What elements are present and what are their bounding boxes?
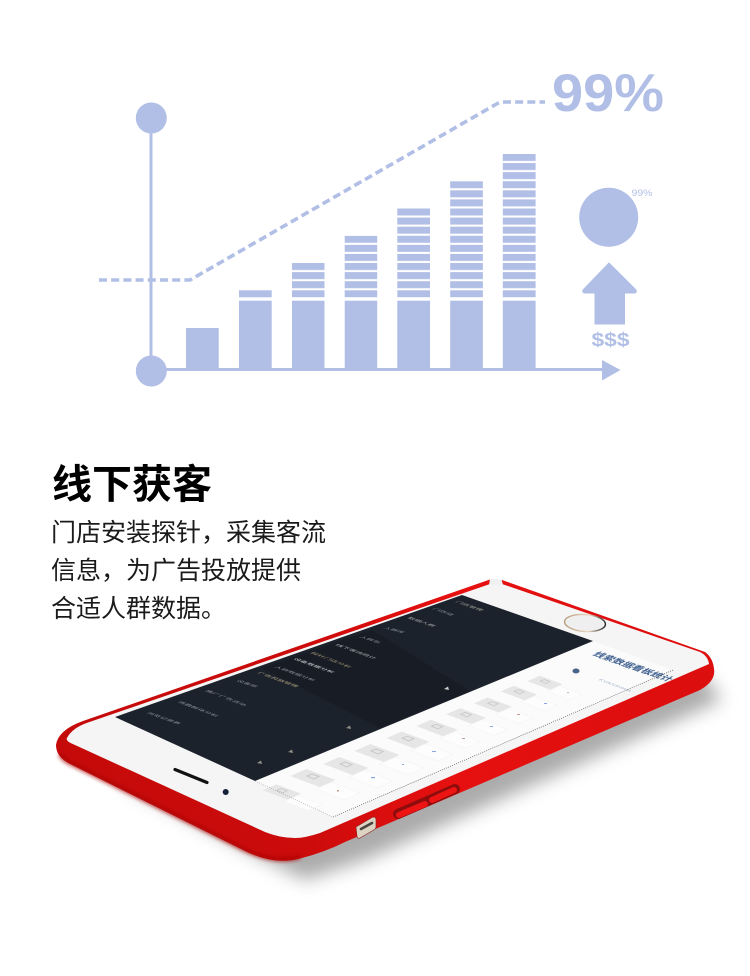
- app sub label: KVASSdata: [597, 679, 634, 693]
- panel left dotted edge: [255, 781, 333, 817]
- app tiles: [263, 676, 582, 811]
- circle with small percentage: [579, 188, 652, 247]
- speaker: [175, 770, 207, 782]
- sidebar menu text: 门店组: [431, 607, 456, 616]
- white app panel: [255, 641, 673, 817]
- app header text: 线索数据看板统计: [590, 650, 677, 683]
- sidebar menu text: 探针门店分析: [309, 651, 354, 669]
- home button: [564, 613, 606, 633]
- horizontal axis with arrow: [136, 356, 621, 386]
- sidebar menu text: 人群数据分析: [273, 665, 318, 682]
- camera: [223, 789, 229, 795]
- sidebar menu text: 数据人群: [406, 616, 438, 628]
- money label: $$$: [592, 330, 630, 351]
- app header icon: [572, 668, 580, 674]
- vertical axis: [136, 102, 167, 368]
- description text: 信息，为广告投放提供: [51, 557, 301, 585]
- panel bottom dotted edge: [333, 670, 673, 817]
- dark screen: [115, 595, 593, 781]
- phone left edge shading: [60, 754, 300, 859]
- sidebar arrows: [257, 686, 449, 764]
- phone illustration: [56, 579, 722, 880]
- phone shadow: [110, 672, 722, 880]
- charging port: [356, 817, 376, 838]
- bar chart with trend line: [99, 64, 664, 386]
- sidebar menu text: 设备组: [235, 679, 260, 688]
- phone face: [67, 584, 709, 838]
- title: 线下获客: [52, 463, 212, 507]
- sidebar menu text: [145, 600, 486, 725]
- bars: [186, 154, 536, 369]
- sidebar menu text: 广告投放管理: [256, 671, 301, 688]
- description text: [51, 519, 326, 623]
- description text: 合适人群数据。: [51, 595, 226, 623]
- sidebar menu text: 门店管理: [454, 600, 486, 612]
- sidebar menu text: 人群库: [382, 626, 407, 634]
- sidebar menu text: 浏览记录表: [145, 711, 183, 725]
- dashed trend line: [99, 102, 545, 280]
- sidebar menu text: 设备数据分析: [292, 657, 337, 674]
- volume buttons: [398, 789, 455, 815]
- circle with small percentage: 99%: [632, 188, 652, 198]
- tile marks: [337, 692, 569, 792]
- sidebar menu text: 线下客流统计: [334, 643, 379, 660]
- headline percentage: 99%: [552, 64, 664, 123]
- dark submenu band: [262, 630, 470, 728]
- top notch: [489, 579, 503, 585]
- description text: 门店安装探针，采集客流: [51, 519, 326, 547]
- sidebar menu text: 人群包: [358, 635, 383, 644]
- phone body: [56, 580, 714, 861]
- sidebar menu text: 消费群体分析: [176, 700, 221, 718]
- icon: up arrow: [583, 263, 636, 324]
- sidebar menu text: 推广广告活动: [204, 689, 249, 707]
